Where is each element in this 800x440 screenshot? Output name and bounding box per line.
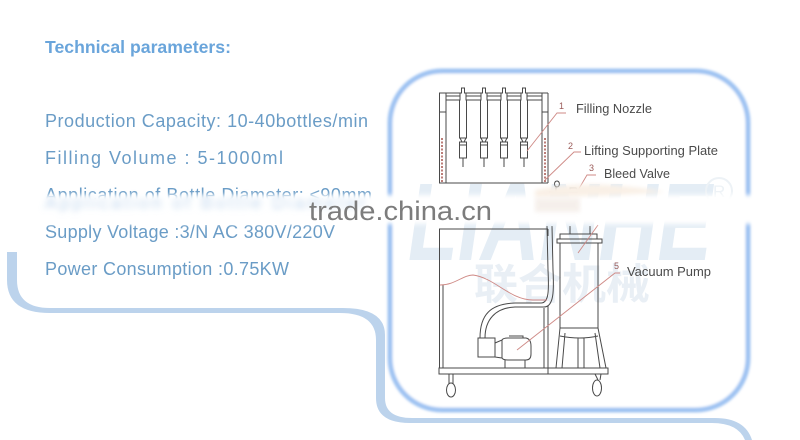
- left panel border over band: [388, 180, 392, 240]
- parameter list: Supply Voltage :3/N AC 380V/220V: [45, 222, 335, 242]
- parameter list: Power Consumption :0.75KW: [45, 259, 289, 279]
- callout numbers: [559, 101, 619, 271]
- callout labels: Vacuum Pump: [627, 264, 711, 279]
- callout labels: Bleed Valve: [604, 166, 670, 181]
- upper frame: [439, 93, 548, 183]
- callout numbers: 2: [568, 141, 573, 151]
- callout labels: Filling Nozzle: [576, 101, 652, 116]
- panel: machine diagram: [390, 71, 748, 410]
- watermark: registered mark: [706, 178, 732, 204]
- lower frame: [439, 229, 608, 374]
- parameter list: Production Capacity: 10-40bottles/min: [45, 111, 368, 131]
- orange watermark smudge: [535, 184, 665, 197]
- filling nozzles: [460, 88, 528, 167]
- callout labels: [576, 101, 718, 279]
- machine remnants in band: [535, 198, 580, 212]
- red leader lines: [440, 113, 620, 350]
- decorative connector curve: [7, 252, 752, 440]
- vacuum pump: [478, 336, 531, 368]
- parameter list: Application of Bottle Diameter: ≤90mm: [45, 185, 372, 205]
- parameter list: [45, 111, 372, 279]
- vacuum hose: [480, 226, 548, 338]
- heading: Technical parameters:: [45, 37, 231, 57]
- callout labels: Lifting Supporting Plate: [584, 143, 718, 158]
- callout numbers: 1: [559, 101, 564, 111]
- parameter list: Filling Volume : 5-1000ml: [45, 148, 283, 168]
- machine drawing: [439, 88, 608, 397]
- white watermark band: [0, 195, 800, 224]
- bleed valve: [549, 181, 578, 192]
- trade.china.cn watermark: trade.china.cn: [309, 196, 492, 226]
- callout numbers: 3: [589, 163, 594, 173]
- watermark: Chinese brand name: 联合机械: [474, 261, 650, 308]
- blurred text remnants: Application of Bottle Diameter: [45, 193, 365, 213]
- watermark: registered mark: R: [713, 182, 725, 201]
- callout numbers: 5: [614, 261, 619, 271]
- vacuum tank: [556, 226, 606, 368]
- casters: [449, 374, 453, 384]
